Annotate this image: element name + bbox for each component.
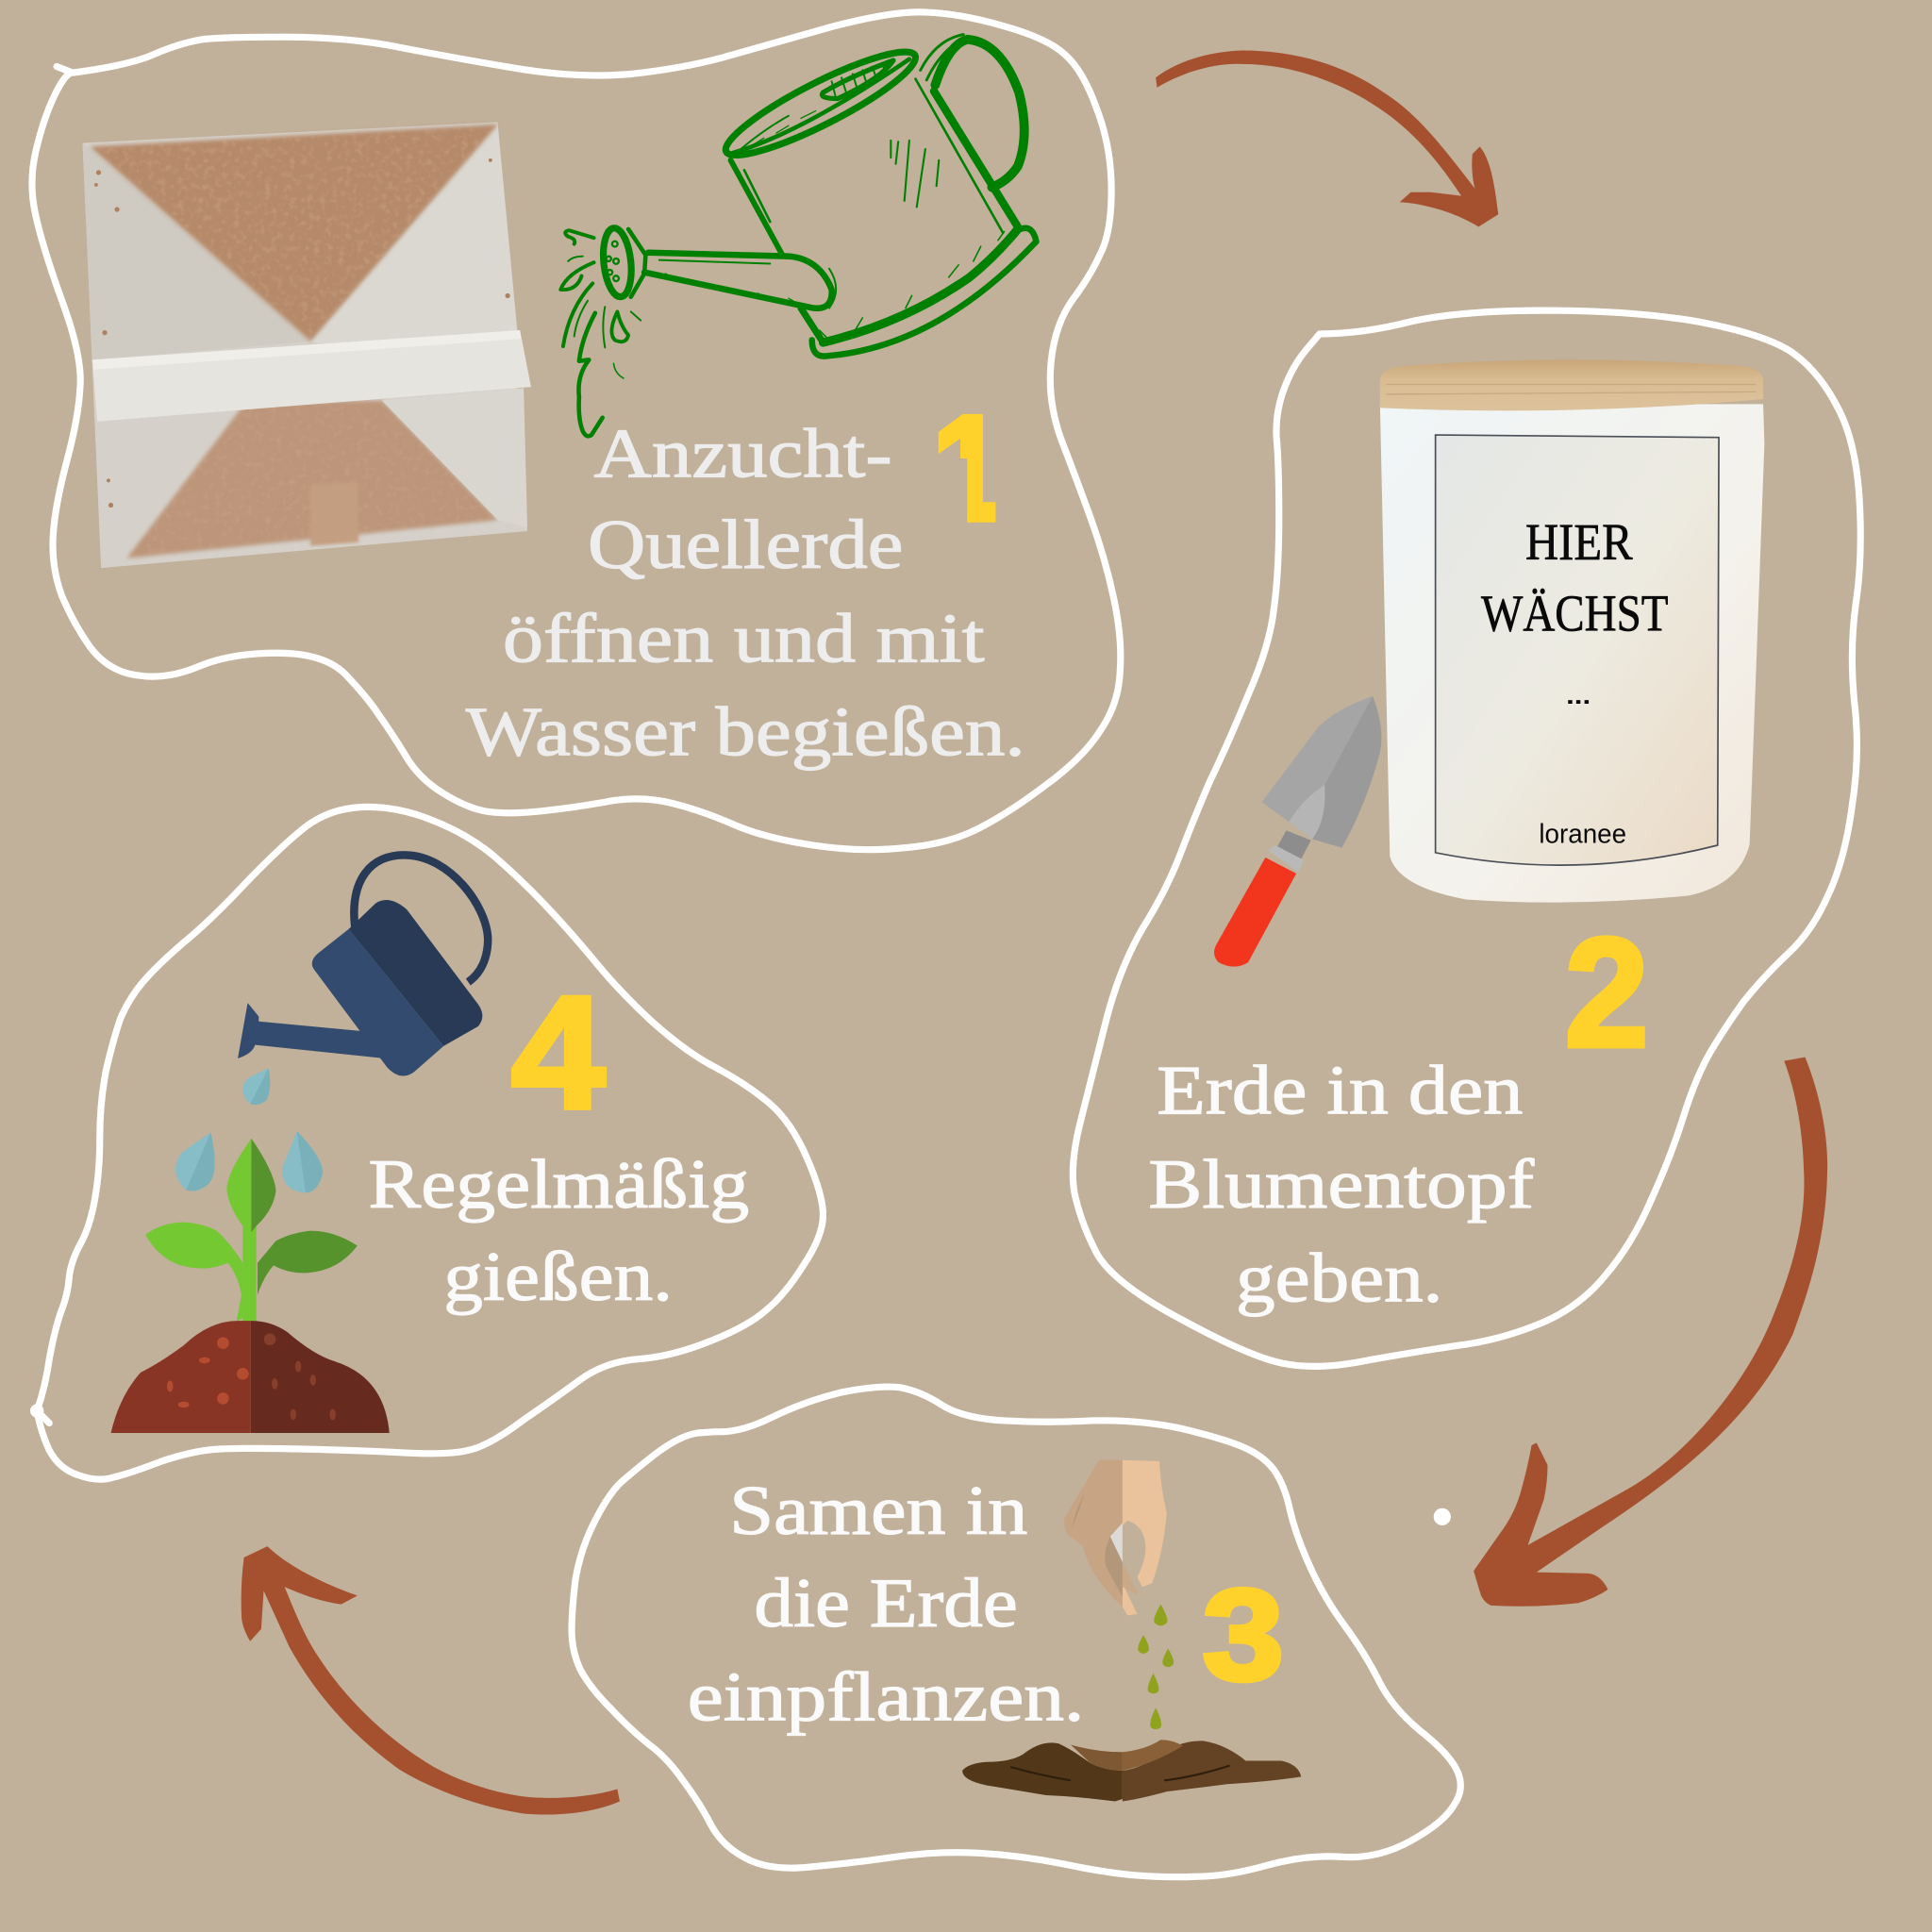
icon: green seeds: [1138, 1605, 1174, 1729]
jar label: [1436, 435, 1719, 865]
icon: hand dropping seeds: [1064, 1460, 1167, 1615]
text: step 2 instructions: [1148, 1053, 1534, 1317]
step number 2: 2: [1565, 906, 1649, 1079]
panel: step 4: [30, 807, 823, 1479]
text: step 2 instructions: geben.: [1236, 1240, 1442, 1317]
arrow: step 3 to step 4: [242, 1546, 620, 1815]
text: step 4 instructions: Regelmäßig: [369, 1146, 749, 1224]
text: step 1 instructions: Anzucht-: [594, 415, 892, 492]
outline: step 2: [1073, 310, 1860, 1366]
panel: step 2: [1073, 310, 1860, 1366]
icon: garden trowel: [1214, 696, 1381, 967]
step number 4: 4: [511, 962, 605, 1141]
text: step 1 instructions: Quellerde: [588, 507, 903, 584]
image: seed soil bag: [83, 122, 531, 568]
jar label: ...: [1566, 681, 1591, 709]
text: step 3 instructions: die Erde: [754, 1565, 1018, 1642]
icon: blue watering can: [238, 855, 488, 1076]
jar label: loranee: [1539, 819, 1626, 849]
outline: step 4: [37, 807, 823, 1479]
step number 3: 3: [1203, 1563, 1284, 1707]
text: step 3 instructions: [688, 1473, 1084, 1736]
decorative dot: [1434, 1508, 1451, 1525]
text: step 1 instructions: [466, 415, 1025, 772]
text: step 1 instructions: öffnen und mit: [503, 600, 985, 677]
icon: soil heap: [111, 1321, 390, 1433]
icon: seedling: [145, 1139, 358, 1324]
text: step 4 instructions: [369, 1146, 749, 1316]
icon: soil mound: [962, 1740, 1301, 1802]
text: step 4 instructions: gießen.: [443, 1239, 673, 1316]
text: step 3 instructions: Samen in: [729, 1473, 1027, 1550]
arrow: step 2 to step 3: [1474, 1058, 1827, 1607]
blob end mark: [30, 1404, 43, 1418]
outline: step 1: [32, 12, 1121, 850]
icon: green watering can: [560, 35, 1036, 436]
text: step 2 instructions: Blumentopf: [1148, 1146, 1534, 1224]
jar label: WÄCHST: [1481, 585, 1668, 642]
outline: step 3: [572, 1387, 1460, 1877]
text: step 3 instructions: einpflanzen.: [688, 1658, 1084, 1736]
arrow: step 1 to step 2: [1156, 51, 1498, 226]
text: step 2 instructions: Erde in den: [1157, 1053, 1523, 1130]
text: step 1 instructions: Wasser begießen.: [466, 694, 1025, 772]
icon: water drops: [175, 1068, 323, 1192]
image: jar with wooden lid: [1380, 359, 1764, 903]
step number 1: 1: [931, 384, 1006, 552]
jar label: HIER: [1525, 513, 1633, 571]
panel: step 3: [572, 1387, 1460, 1877]
panel: step 1: [32, 12, 1121, 850]
